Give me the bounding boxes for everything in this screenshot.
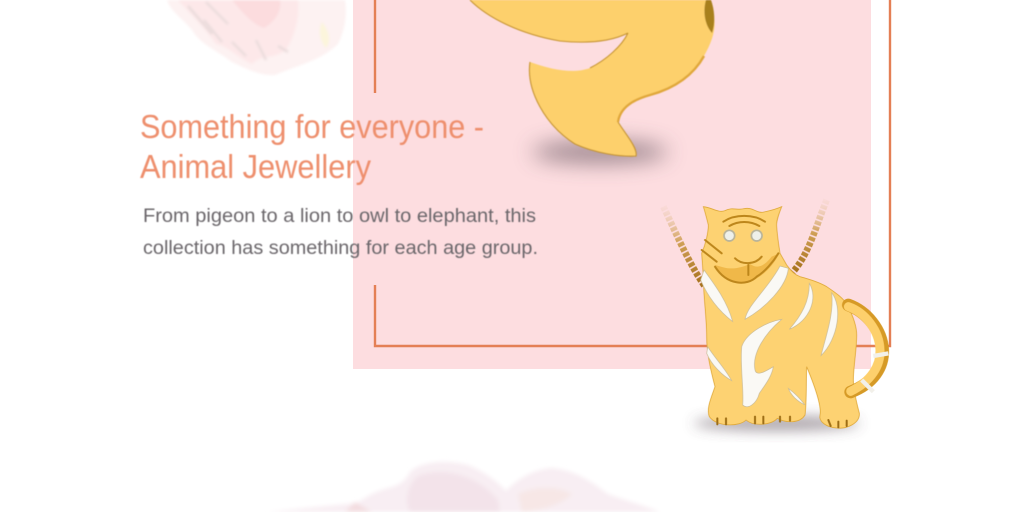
tiger face details — [715, 253, 779, 283]
heading: Animal Jewellery — [140, 148, 371, 185]
heading — [140, 108, 484, 185]
white stripes — [701, 266, 838, 407]
panel: pink background — [353, 0, 871, 369]
orange frame — [375, 0, 890, 346]
decorative flower: bottom — [267, 462, 660, 512]
body text: From pigeon to a lion to owl to elephant, this — [143, 206, 536, 227]
body and head — [702, 207, 859, 428]
body text: collection has something for each age group. — [143, 238, 538, 259]
pendant: duck tail — [470, 0, 715, 156]
tiger toes — [717, 417, 847, 427]
pendant: tiger with chain — [663, 200, 888, 431]
tiger eyes — [724, 230, 762, 241]
ground shadow — [693, 416, 860, 431]
body text — [143, 206, 538, 259]
heading: Something for everyone - — [140, 108, 484, 145]
tail — [848, 305, 888, 392]
chain — [663, 200, 827, 287]
pendant shadow: duck — [532, 141, 668, 163]
decorative flower: top — [167, 0, 346, 75]
